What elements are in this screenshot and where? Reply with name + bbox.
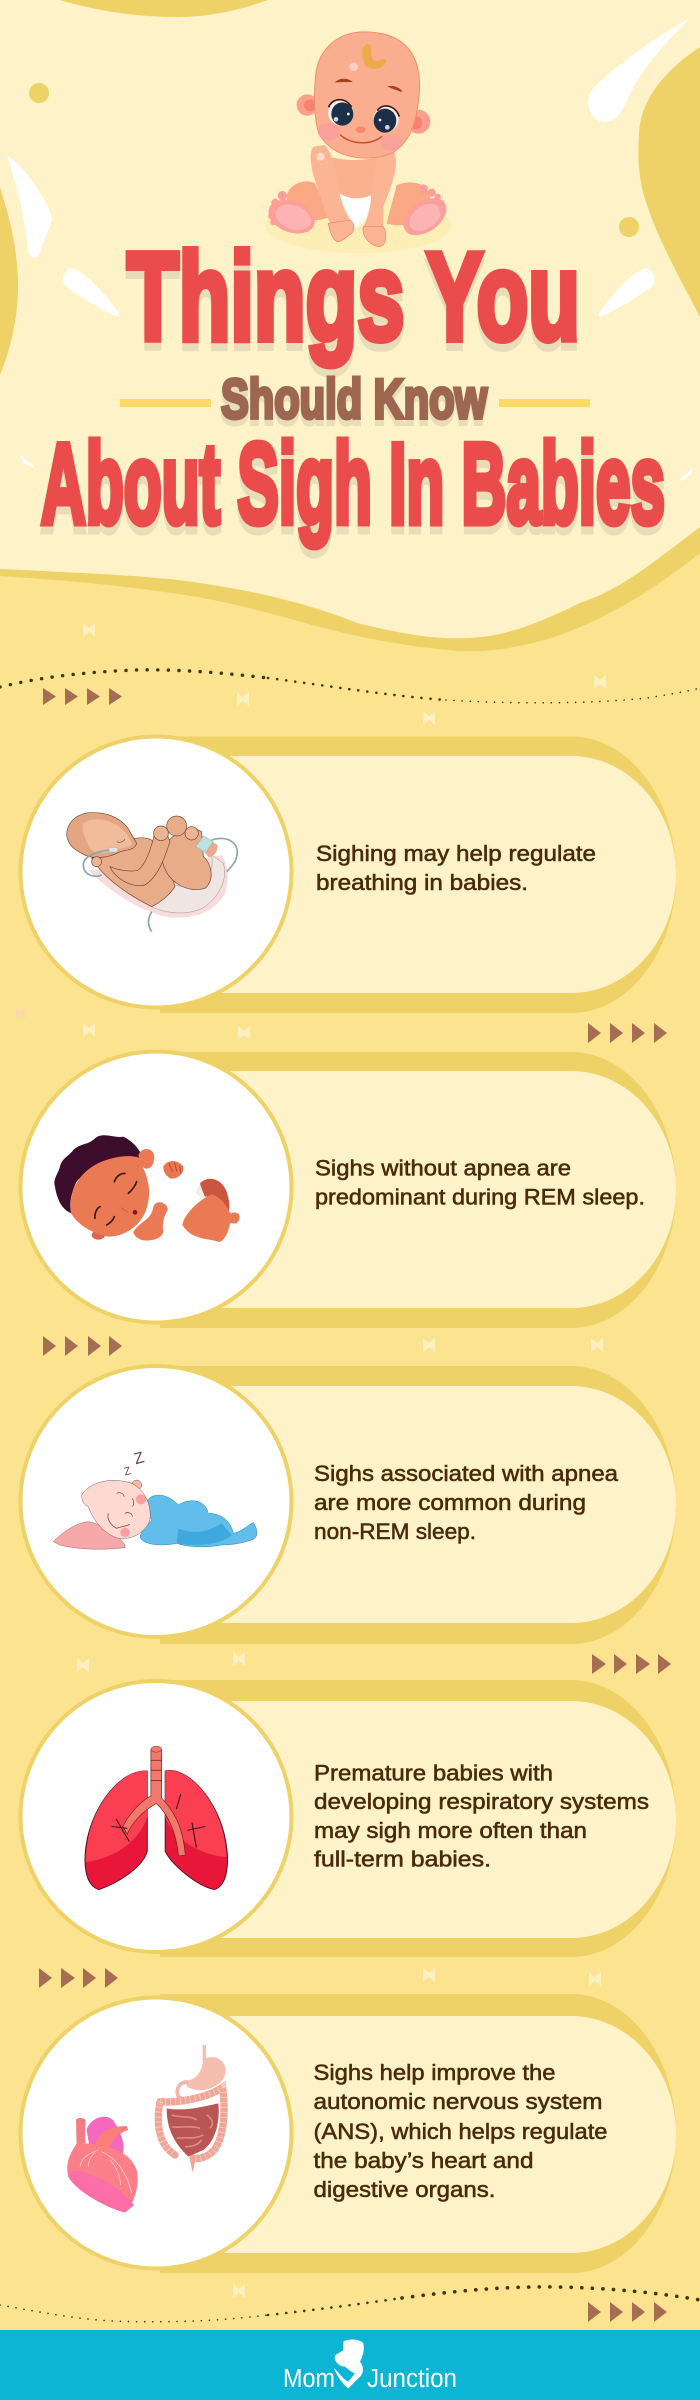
arrows row 6 (588, 2302, 667, 2322)
text: card 5: Sighs help improve the (314, 2060, 556, 2085)
text: card 2: Sighs without apnea are (315, 1156, 571, 1180)
text: card 1 (316, 841, 596, 895)
card 4 pill (160, 1680, 676, 1957)
icon: lungs (85, 1746, 228, 1890)
icon: heart and digestive organs (67, 2045, 226, 2213)
card 3 circle (20, 1366, 292, 1637)
card 5 circle (20, 1998, 292, 2268)
icon: sleeping baby in blue: Z (132, 1449, 146, 1468)
arrows row 2 (588, 1023, 667, 1043)
dotted line top (0, 670, 700, 703)
card 2 (20, 1052, 676, 1328)
icon: sleeping baby in blue: Z (123, 1465, 133, 1479)
text: card 1: breathing in babies. (316, 870, 528, 895)
card 1 (20, 736, 676, 1013)
text: card 4: full-term babies. (314, 1846, 491, 1872)
text: card 5: (ANS), which helps regulate (314, 2119, 608, 2144)
card 3 (20, 1366, 676, 1644)
decorative blobs (0, 0, 700, 375)
icon: sleeping baby in blue (53, 1449, 257, 1549)
title rule left (120, 399, 211, 407)
logo: MomJunction: Junction (367, 2365, 457, 2393)
text: card 4: may sigh more often than (314, 1818, 587, 1843)
text: card 2: predominant during REM sleep. (315, 1184, 645, 1210)
illustration: sitting baby (264, 32, 453, 253)
dotted line bottom (0, 2287, 700, 2322)
card 4 circle (20, 1681, 292, 1952)
text: card 2 (315, 1156, 645, 1210)
arrows row 3 (43, 1336, 122, 1356)
header cream area with wave (0, 0, 700, 651)
card 4 (20, 1680, 676, 1957)
text: card 3: non-REM sleep. (314, 1519, 476, 1544)
text: card 3: are more common during (314, 1490, 586, 1515)
card 5 (20, 1994, 676, 2273)
text: card 4: developing respiratory systems (314, 1789, 649, 1814)
card 5 pill (160, 1994, 676, 2273)
text: card 5 (314, 2060, 608, 2202)
white accent shapes (7, 18, 693, 481)
arrows row 1 (43, 688, 122, 705)
text: card 5: the baby’s heart and (314, 2148, 534, 2173)
title line 2: Should Know (221, 367, 487, 430)
arrows row 4 (592, 1654, 671, 1674)
text: card 5: digestive organs. (314, 2177, 496, 2202)
text: card 5: autonomic nervous system (314, 2089, 602, 2114)
logo: MomJunction: Mom (283, 2365, 335, 2393)
icon: premature baby with tubes (67, 813, 237, 932)
card 3 pill (160, 1366, 676, 1644)
footer band (0, 2330, 700, 2400)
arrows row 5 (39, 1968, 118, 1988)
card 1 pill (160, 736, 676, 1013)
card 2 circle (20, 1052, 292, 1322)
card 2 pill (160, 1052, 676, 1328)
text: card 1: Sighing may help regulate (316, 841, 596, 866)
title rule right (499, 399, 590, 407)
text: card 4 (314, 1760, 649, 1872)
icon: sleeping baby with dark hair (54, 1135, 240, 1242)
logo: MomJunction (283, 2340, 457, 2393)
text: card 3 (314, 1461, 619, 1544)
text: card 4: Premature babies with (314, 1760, 553, 1786)
card 1 circle (20, 736, 292, 1008)
text: card 3: Sighs associated with apnea (314, 1461, 619, 1486)
decorative bows (16, 623, 606, 2298)
